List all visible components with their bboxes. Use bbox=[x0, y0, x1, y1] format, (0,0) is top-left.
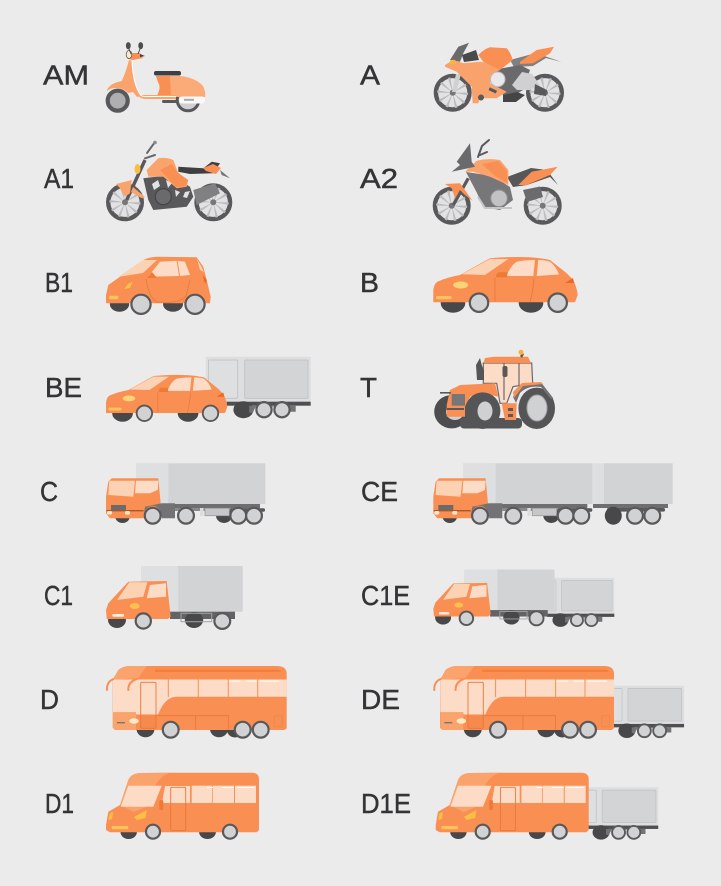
label: D: D bbox=[40, 684, 59, 715]
icon: adventure motorcycle bbox=[435, 140, 560, 222]
icon: box trailer bbox=[569, 787, 658, 840]
label: B: B bbox=[360, 267, 379, 298]
icon: coach bus bbox=[107, 666, 287, 738]
icon: orange scooter bbox=[107, 42, 205, 111]
icon: small car bbox=[106, 257, 211, 314]
label: BE: BE bbox=[45, 372, 82, 403]
icon: hatchback car bbox=[433, 257, 578, 313]
label: A: A bbox=[360, 60, 380, 90]
icon: coach bus bbox=[434, 666, 614, 738]
icon: car towing bbox=[106, 375, 227, 422]
icon: box trailer bbox=[206, 357, 311, 418]
label: AM: AM bbox=[43, 60, 89, 90]
label: D1: D1 bbox=[45, 788, 74, 819]
icon: light truck bbox=[433, 570, 555, 625]
icon: naked motorcycle bbox=[108, 141, 230, 219]
row: category A sport motorcycle bbox=[360, 43, 562, 110]
icon: minibus bbox=[436, 773, 589, 839]
row: category B car bbox=[360, 257, 578, 313]
row: category D bus bbox=[40, 666, 287, 738]
label: C1E: C1E bbox=[361, 580, 410, 611]
icon: sport motorcycle bbox=[436, 43, 562, 110]
icon: semi truck bbox=[106, 463, 265, 524]
icon: box trailer bbox=[595, 686, 684, 738]
label: C1: C1 bbox=[44, 580, 73, 611]
row: category B1 small car bbox=[45, 257, 211, 314]
row: category D1E minibus with trailer bbox=[361, 773, 658, 840]
icon: second trailer bbox=[593, 463, 673, 525]
icon: semi truck bbox=[433, 463, 593, 524]
row: category C truck bbox=[40, 463, 265, 524]
row: category A1 motorcycle bbox=[44, 141, 230, 219]
icon: box trailer bbox=[530, 578, 614, 627]
icon: light truck bbox=[106, 566, 243, 629]
icon: tractor bbox=[434, 350, 555, 429]
row: category CE truck with second trailer bbox=[361, 463, 673, 525]
row: category BE car with trailer bbox=[45, 357, 311, 422]
row: category T tractor bbox=[360, 350, 555, 429]
row: category D1 minibus bbox=[45, 773, 259, 839]
row: category C1 light truck bbox=[44, 566, 243, 629]
label: A1: A1 bbox=[44, 163, 74, 194]
row: category A2 motorcycle bbox=[360, 140, 560, 222]
label: D1E: D1E bbox=[361, 788, 411, 819]
label: CE: CE bbox=[361, 476, 398, 507]
row: category AM scooter bbox=[43, 42, 205, 111]
label: A2: A2 bbox=[360, 163, 398, 194]
label: C: C bbox=[40, 476, 58, 507]
label: DE: DE bbox=[361, 684, 400, 715]
row: category DE bus with trailer bbox=[361, 666, 684, 738]
label: B1: B1 bbox=[45, 267, 73, 298]
icon: minibus bbox=[106, 773, 259, 839]
label: T: T bbox=[360, 372, 377, 403]
row: category C1E light truck with trailer bbox=[361, 570, 614, 627]
